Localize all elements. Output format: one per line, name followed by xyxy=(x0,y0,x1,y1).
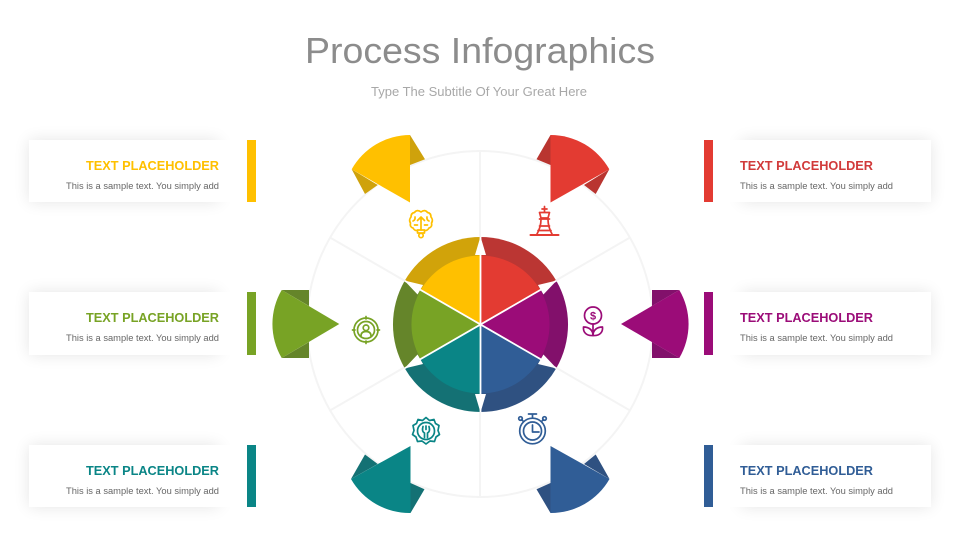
heading blue: TEXT PLACEHOLDER xyxy=(740,464,873,478)
bar blue xyxy=(704,445,713,507)
hub spokes xyxy=(405,237,556,412)
panel: card blue xyxy=(704,425,931,527)
text yellow: This is a sample text. You simply add xyxy=(66,181,219,191)
text blue: This is a sample text. You simply add xyxy=(740,486,893,496)
text red: This is a sample text. You simply add xyxy=(740,181,893,191)
bar teal xyxy=(247,445,256,507)
bar yellow xyxy=(247,140,256,202)
title: Process Infographics xyxy=(305,30,655,71)
heading green: TEXT PLACEHOLDER xyxy=(86,311,219,325)
hub outer segments xyxy=(480,237,556,324)
panel: card purple xyxy=(704,272,931,375)
text purple: This is a sample text. You simply add xyxy=(740,333,893,343)
panel: card red xyxy=(704,120,931,222)
panel: card green xyxy=(29,272,256,375)
panel: card yellow xyxy=(29,120,256,222)
icon: target person xyxy=(352,316,380,344)
icon: stopwatch xyxy=(519,414,546,444)
heading yellow: TEXT PLACEHOLDER xyxy=(86,159,219,173)
petal: yellow xyxy=(352,135,425,202)
bar purple xyxy=(704,292,713,355)
heading teal: TEXT PLACEHOLDER xyxy=(86,464,219,478)
icon: brain bulb xyxy=(410,211,432,238)
icon: chess king xyxy=(530,206,558,235)
panel: card teal xyxy=(29,425,256,527)
icon: gear wrench xyxy=(412,418,440,444)
petal: green xyxy=(272,290,339,358)
heading red: TEXT PLACEHOLDER xyxy=(740,159,873,173)
bar red xyxy=(704,140,713,202)
bar green xyxy=(247,292,256,355)
subtitle: Type The Subtitle Of Your Great Here xyxy=(371,84,587,99)
petal: purple xyxy=(621,290,689,358)
hub inner segments xyxy=(480,255,540,324)
heading purple: TEXT PLACEHOLDER xyxy=(740,311,873,325)
petal: red xyxy=(536,135,609,202)
text teal: This is a sample text. You simply add xyxy=(66,486,219,496)
hub arrowheads xyxy=(402,236,559,412)
icon: money flower: $ xyxy=(590,310,596,322)
petal: blue xyxy=(536,446,610,513)
text green: This is a sample text. You simply add xyxy=(66,333,219,343)
petal: teal xyxy=(351,446,424,513)
hub wheel xyxy=(393,236,568,412)
outer ring with spokes xyxy=(307,151,653,497)
icon: money flower xyxy=(583,307,603,336)
